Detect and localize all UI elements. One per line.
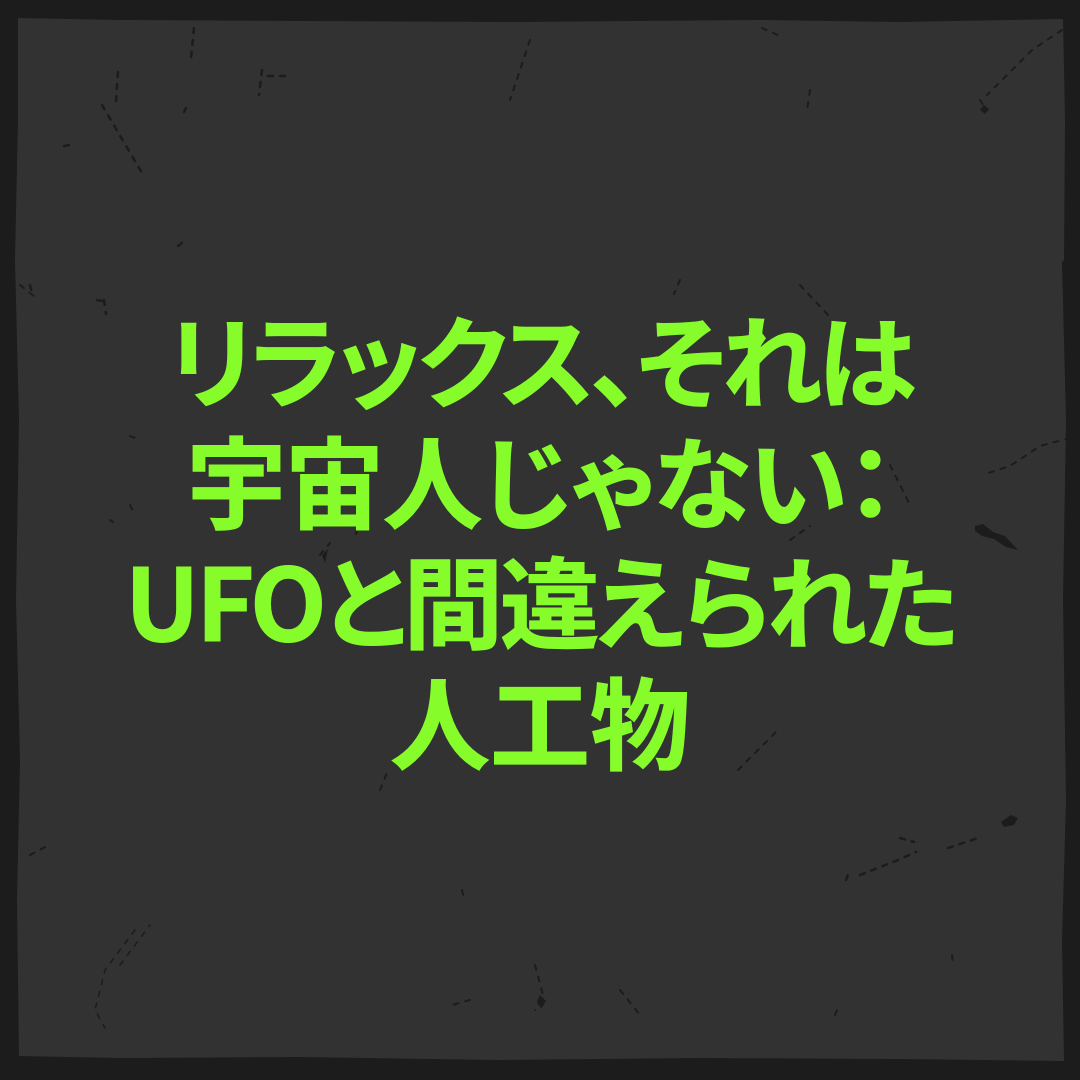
title: 人工物 [390, 646, 690, 790]
title: リラックス、それは [168, 284, 912, 429]
title: 宇宙人じゃない： [187, 404, 893, 550]
title: UFOと間違えられた [125, 525, 955, 670]
title [125, 284, 955, 790]
